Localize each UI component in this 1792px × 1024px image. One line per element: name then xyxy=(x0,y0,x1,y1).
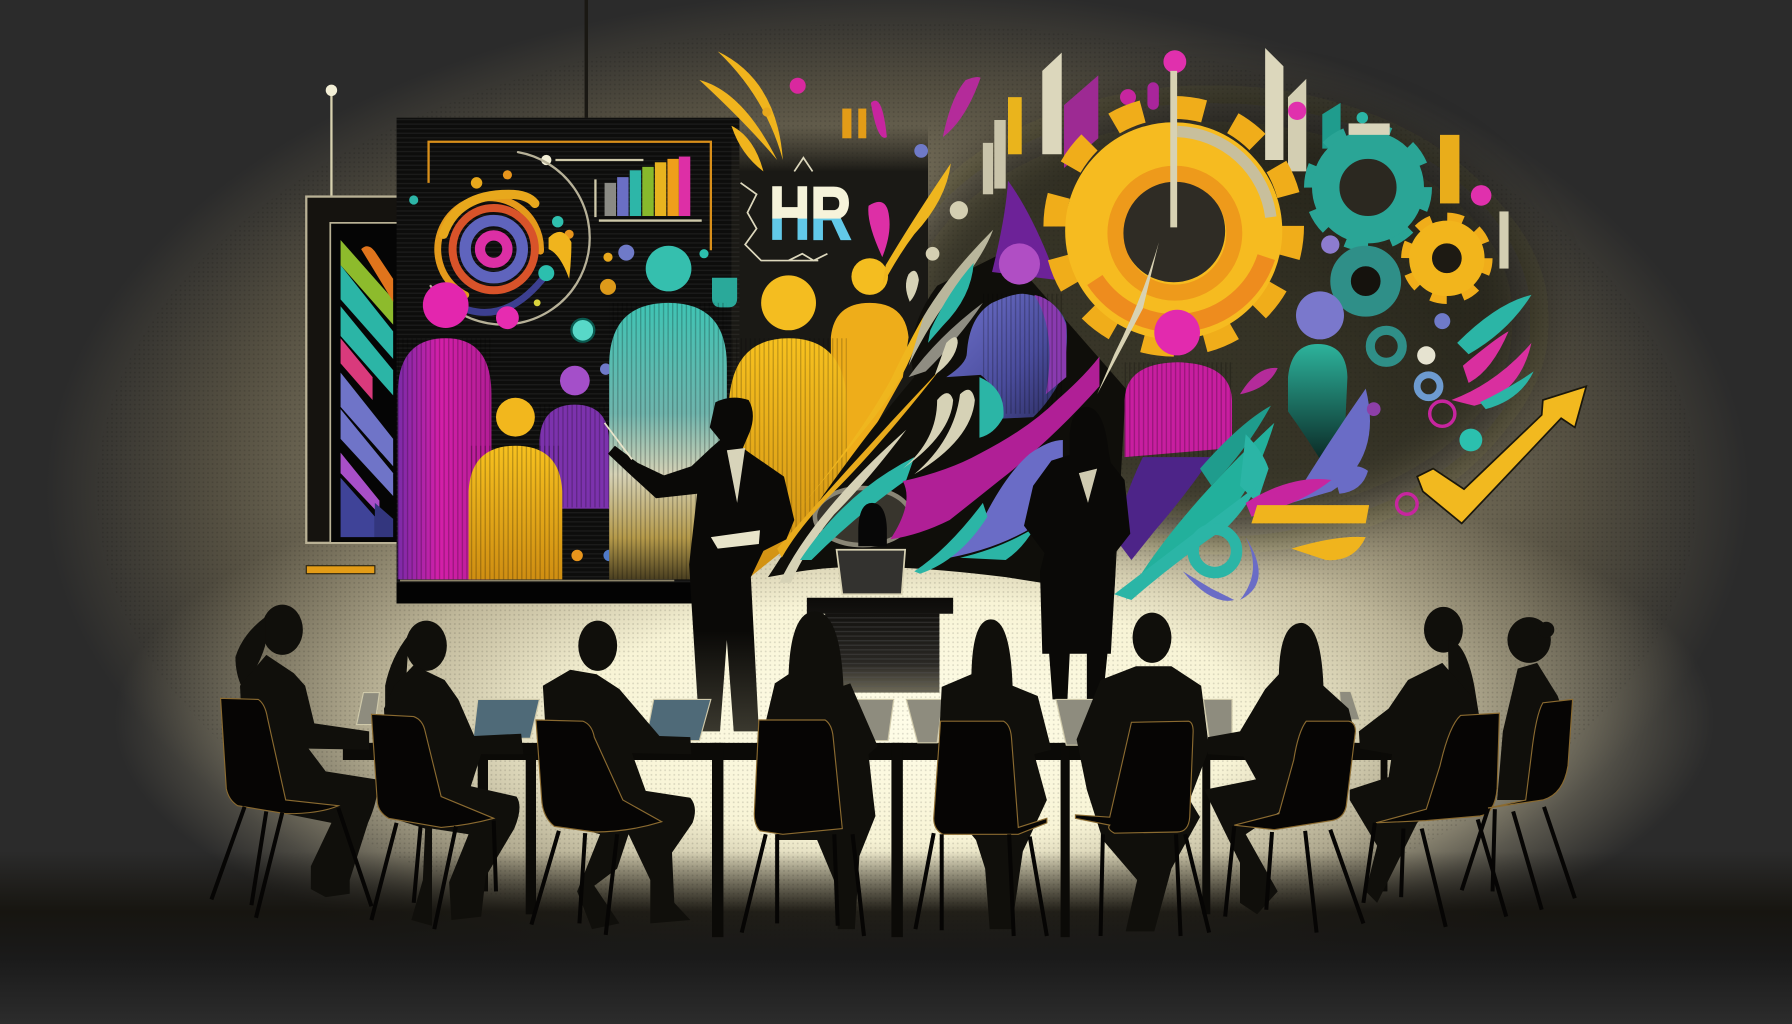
hanging rods xyxy=(326,0,586,200)
chair 6 xyxy=(1075,721,1209,936)
icon: lower teal gear xyxy=(1341,256,1391,306)
chair 8 xyxy=(1363,713,1506,927)
seated person 9 xyxy=(1497,617,1566,800)
icon: spiral chart xyxy=(402,137,603,338)
artwork: flowing swooshes xyxy=(699,51,1126,594)
chair 7 xyxy=(1225,721,1363,933)
dark backdrop behind artwork xyxy=(891,103,1531,537)
figure: magenta right person xyxy=(1125,310,1232,457)
seated person 4 xyxy=(763,611,878,929)
artwork: upright bars behind gears xyxy=(983,48,1509,269)
chart: screen bar chart xyxy=(541,155,702,221)
seated person 8 xyxy=(1350,607,1491,903)
figure: yellow front person xyxy=(469,398,562,579)
seated person 2 xyxy=(384,621,523,926)
chair 9 xyxy=(1462,699,1575,910)
icon: large yellow gear xyxy=(1055,71,1293,394)
panel: left side board xyxy=(306,197,400,574)
figure: magenta person xyxy=(398,282,491,579)
standing woman xyxy=(1024,407,1130,699)
icon: small yellow gear xyxy=(1407,218,1487,298)
seated person 7 xyxy=(1205,623,1354,914)
figure: blue person xyxy=(946,243,1067,419)
chair 4 xyxy=(742,720,864,936)
artwork: right leaves and dots xyxy=(1114,235,1534,601)
chair 1 xyxy=(211,698,371,918)
floor shadow xyxy=(0,851,1792,1024)
table xyxy=(343,743,1408,937)
figure: teal person xyxy=(609,246,727,579)
chair 2 xyxy=(371,714,496,929)
laptops on table xyxy=(357,691,1360,745)
chair 5 xyxy=(915,721,1047,936)
icon: HR label xyxy=(741,158,851,261)
figure: teal right person xyxy=(1288,291,1347,469)
seated person 3 xyxy=(543,621,695,929)
icon: teal gear xyxy=(1311,123,1425,245)
decorative dots on the screen xyxy=(409,170,737,561)
arrow: rising yellow arrow xyxy=(1417,386,1586,523)
seated person 1 xyxy=(235,605,377,897)
chair 3 xyxy=(531,720,662,935)
panel: main presentation screen xyxy=(397,118,928,603)
figure: yellow centre person xyxy=(729,275,847,583)
podium with laptop and seated person xyxy=(807,503,953,693)
presenter xyxy=(605,398,794,731)
figure: purple person xyxy=(539,366,609,509)
icon: HR label: HR xyxy=(769,171,851,255)
seated person 5 xyxy=(939,619,1051,929)
figure: yellow back person xyxy=(831,258,909,469)
seated person 6 xyxy=(1077,613,1209,931)
